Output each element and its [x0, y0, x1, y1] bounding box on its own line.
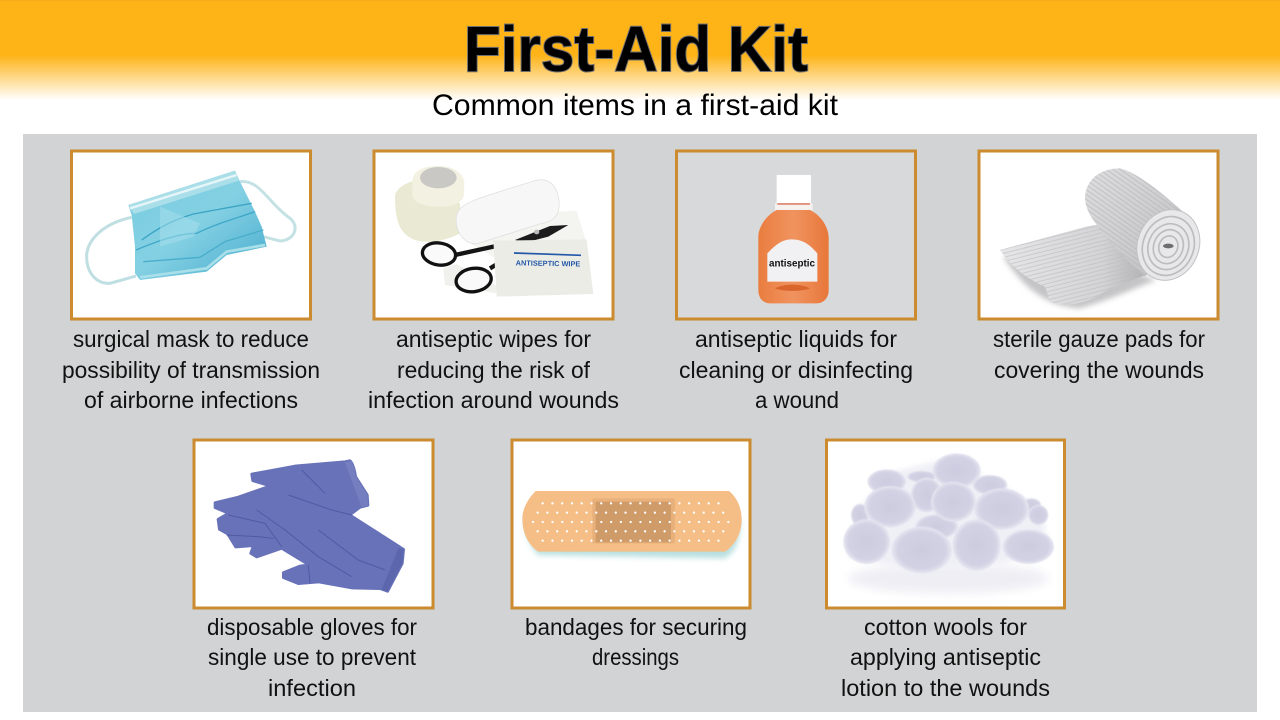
caption: surgical mask: possibility of transmission	[62, 357, 320, 383]
caption: sterile gauze: covering the wounds	[994, 357, 1204, 383]
card: cotton wool	[826, 440, 1064, 701]
caption: disposable gloves: infection	[268, 675, 356, 701]
caption: antiseptic liquids	[679, 326, 913, 413]
caption: antiseptic liquids: antiseptic liquids for	[695, 326, 897, 352]
card: bandage	[512, 440, 750, 670]
caption: antiseptic wipes: reducing the risk of	[397, 357, 591, 383]
caption: antiseptic wipes	[368, 326, 619, 413]
card: antiseptic liquids	[676, 151, 916, 413]
caption: bandage	[525, 614, 747, 670]
caption: cotton wool: applying antiseptic	[850, 644, 1041, 670]
card: sterile gauze	[979, 151, 1218, 383]
caption: bandage: bandages for securing	[525, 614, 747, 640]
icon: tape, gauze, scissors and wipe	[395, 166, 593, 297]
icon: tape, gauze, scissors and wipe: ANTISEPTIC WIPE	[516, 258, 581, 268]
caption: disposable gloves: single use to prevent	[208, 644, 417, 670]
icon: antiseptic bottle	[758, 175, 829, 303]
caption: sterile gauze: sterile gauze pads for	[993, 326, 1205, 352]
card: disposable gloves	[194, 440, 433, 701]
panel: grey background	[23, 134, 1257, 712]
card: antiseptic wipes	[368, 151, 619, 413]
icon: cotton balls	[843, 453, 1054, 593]
header gradient band	[0, 0, 1280, 100]
caption: disposable gloves: disposable gloves for	[207, 614, 417, 640]
caption: sterile gauze	[993, 326, 1205, 383]
caption: bandage: dressings	[592, 644, 679, 670]
card: surgical mask	[62, 151, 320, 413]
caption: antiseptic wipes: infection around wounds	[368, 387, 619, 413]
icon: antiseptic bottle: antiseptic	[769, 258, 816, 269]
caption: antiseptic wipes: antiseptic wipes for	[396, 326, 591, 352]
caption: cotton wool: lotion to the wounds	[841, 675, 1050, 701]
caption: antiseptic liquids: a wound	[755, 387, 839, 413]
caption: surgical mask: surgical mask to reduce	[73, 326, 309, 352]
caption: disposable gloves	[207, 614, 417, 701]
caption: cotton wool: cotton wools for	[864, 614, 1027, 640]
icon: gauze roll	[1000, 168, 1210, 308]
caption: cotton wool	[841, 614, 1050, 701]
subtitle: Common items in a first-aid kit	[432, 89, 839, 122]
caption: surgical mask: of airborne infections	[84, 387, 298, 413]
icon: surgical mask	[87, 171, 295, 283]
title: First-Aid Kit	[464, 13, 808, 85]
icon: adhesive bandage	[522, 491, 742, 558]
caption: surgical mask	[62, 326, 320, 413]
caption: antiseptic liquids: cleaning or disinfecting	[679, 357, 913, 383]
icon: gloves	[215, 461, 404, 591]
